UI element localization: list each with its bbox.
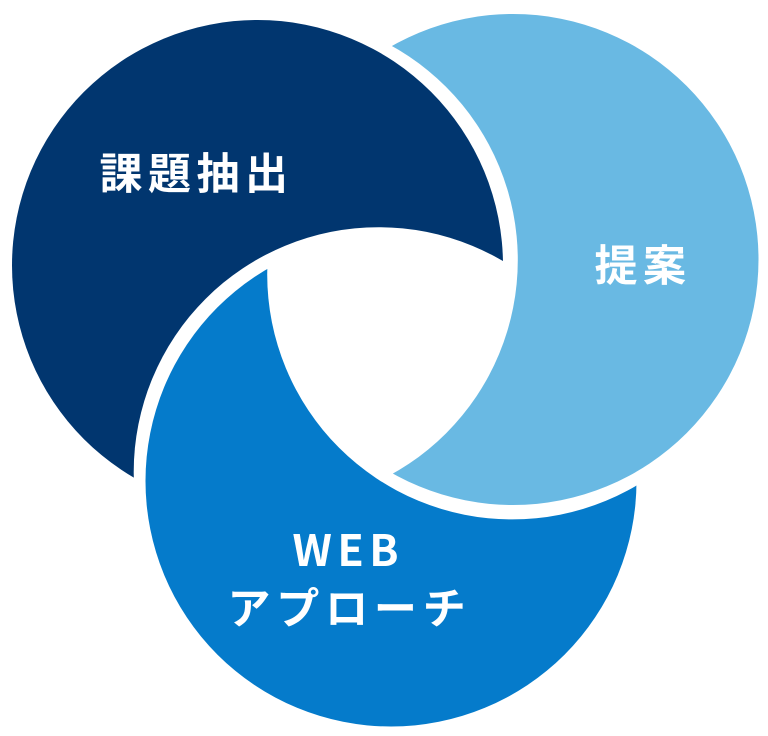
label: 課題抽出: 課題抽出 — [100, 140, 294, 202]
segment: light blue crescent — [392, 14, 758, 505]
label: WEB アプローチ: WEB — [292, 517, 404, 579]
segment: mid blue crescent — [146, 236, 636, 726]
label: WEB アプローチ — [228, 517, 472, 637]
label: WEB アプローチ: アプローチ — [228, 575, 472, 637]
segment: dark navy crescent — [12, 20, 503, 511]
label: 提案: 提案 — [594, 232, 692, 294]
